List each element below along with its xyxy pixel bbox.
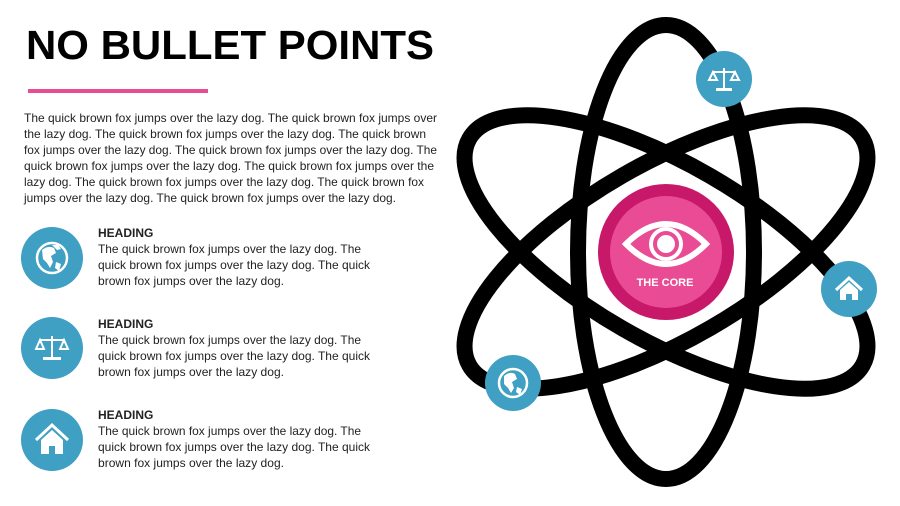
icon: eye bbox=[626, 224, 706, 264]
intro paragraph: lazy dog. The quick brown fox jumps over the lazy dog. The quick brown fox bbox=[24, 175, 424, 189]
text block 2: The quick brown fox jumps over the lazy dog. The bbox=[98, 333, 361, 347]
atom diagram bbox=[425, 25, 900, 479]
item 1: globe bbox=[21, 226, 371, 289]
intro paragraph: fox jumps over the lazy dog. The quick brown fox jumps over the lazy dog. The bbox=[24, 143, 437, 157]
orbit icon: house bbox=[821, 261, 877, 317]
text block 3: HEADING bbox=[98, 408, 153, 422]
intro paragraph: The quick brown fox jumps over the lazy dog. The quick brown fox jumps over bbox=[24, 111, 437, 125]
item 3: house bbox=[21, 408, 371, 471]
core label: THE CORE bbox=[637, 277, 693, 289]
text block 1: HEADING bbox=[98, 226, 153, 240]
orbits bbox=[425, 25, 900, 479]
intro paragraph: jumps over the lazy dog. The quick brown fox jumps over the lazy dog. bbox=[23, 191, 396, 205]
intro paragraph bbox=[23, 111, 437, 205]
text block 1: brown fox jumps over the lazy dog. bbox=[98, 274, 284, 288]
text block 2 bbox=[98, 317, 371, 379]
text block 3: The quick brown fox jumps over the lazy dog. The bbox=[98, 424, 361, 438]
icon: scale bbox=[21, 317, 83, 379]
text block 3 bbox=[98, 408, 371, 470]
text block 3: quick brown fox jumps over the lazy dog. The quick bbox=[98, 440, 371, 454]
item 2: scale bbox=[21, 317, 371, 379]
orbit icon: globe bbox=[485, 355, 541, 411]
icon: house bbox=[21, 409, 83, 471]
core bbox=[598, 184, 734, 320]
text block 3: brown fox jumps over the lazy dog. bbox=[98, 456, 284, 470]
text block 1 bbox=[98, 226, 371, 288]
orbit icon: scale bbox=[696, 51, 752, 107]
title: NO BULLET POINTS bbox=[26, 22, 434, 68]
text block 2: HEADING bbox=[98, 317, 153, 331]
text block 2: brown fox jumps over the lazy dog. bbox=[98, 365, 284, 379]
intro paragraph: the lazy dog. The quick brown fox jumps over the lazy dog. The quick brown bbox=[24, 127, 426, 141]
text block 1: quick brown fox jumps over the lazy dog. The quick bbox=[98, 258, 371, 272]
icon: globe bbox=[21, 227, 83, 289]
intro paragraph: quick brown fox jumps over the lazy dog. The quick brown fox jumps over the bbox=[24, 159, 434, 173]
text block 1: The quick brown fox jumps over the lazy dog. The bbox=[98, 242, 361, 256]
text block 2: quick brown fox jumps over the lazy dog. The quick bbox=[98, 349, 371, 363]
pink underline bbox=[28, 89, 208, 93]
